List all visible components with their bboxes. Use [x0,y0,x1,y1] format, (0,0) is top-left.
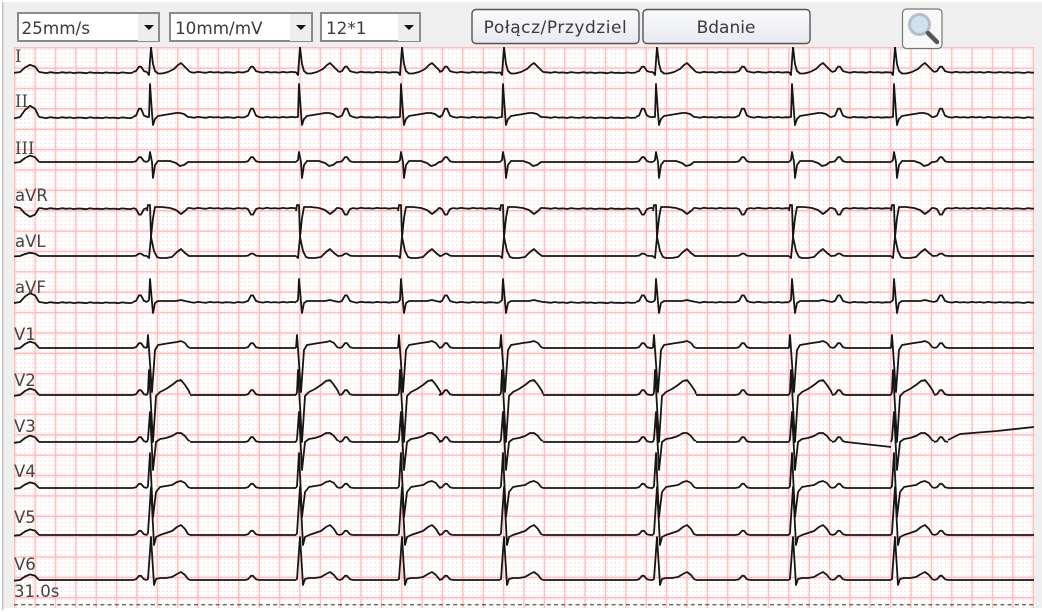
label: I: I [15,47,22,66]
label: V2: V2 [14,371,36,390]
trace: lead III [14,152,1034,178]
trace: lead V4 [14,453,1034,517]
label: III: III [15,139,35,158]
label: V5: V5 [14,508,36,527]
button: connect: Połącz/Przydziel [484,18,627,38]
toolbar select: layout: 12*1 [326,18,366,38]
trace: lead I [14,47,1037,75]
label: time: 31.0s [14,582,59,601]
label: aVF: aVF [15,278,46,297]
label: V4: V4 [14,462,36,481]
label: V1: V1 [14,325,36,344]
trace: lead V2 [14,370,1034,442]
window left border [2,2,3,610]
button: exam: Bdanie [697,18,755,38]
trace: lead aVR [14,205,1037,237]
trace: lead V1 [14,335,1034,392]
toolbar select: speed: 25mm/s [22,18,90,38]
trace: lead aVF [14,279,1037,313]
trace: lead V3 with baseline wander [14,412,1034,470]
toolbar select: speed [18,13,159,41]
label: II: II [15,92,28,111]
trace: lead V6 [14,537,1034,585]
button: exam [643,10,810,44]
toolbar select: layout [321,13,420,41]
toolbar select: gain: 10mm/mV [175,18,263,38]
label: V3: V3 [14,417,36,436]
icon: magnifier button [902,9,942,48]
label: aVL: aVL [15,232,46,251]
time axis dashed line [14,604,1034,606]
lead labels [14,47,59,601]
trace: lead II [14,84,1037,125]
trace: lead aVL [14,237,1034,258]
label: V6: V6 [14,555,36,574]
toolbar select: gain [170,13,312,41]
button: connect [472,10,639,44]
trace: lead V5 [14,487,1034,545]
label: aVR: aVR [15,186,48,205]
